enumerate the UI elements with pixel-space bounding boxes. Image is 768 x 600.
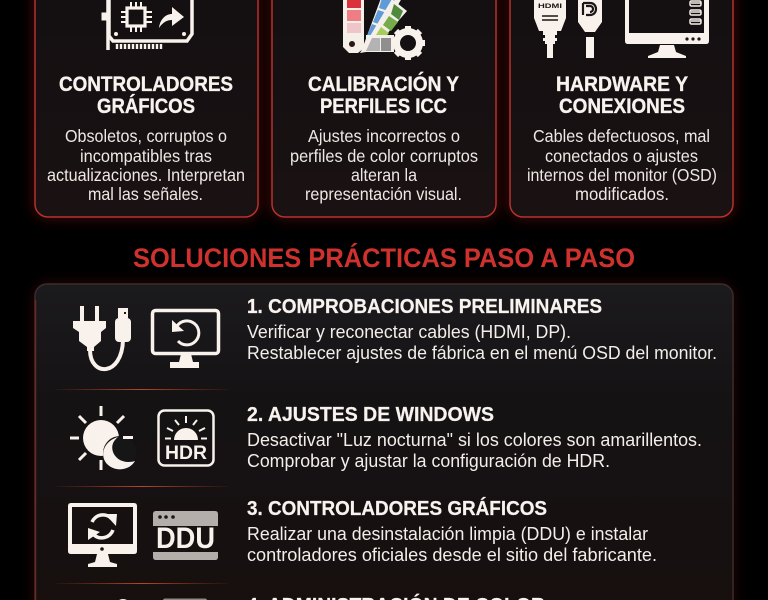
text: controladores gráficos: Obsoletos, corruptos o	[65, 126, 227, 146]
heading: hardware y conexiones: CONEXIONES	[559, 95, 685, 118]
heading: calibración y perfiles ICC: PERFILES ICC	[320, 95, 447, 118]
step 3 text: controladores oficiales desde el sitio del fabricante.	[247, 545, 657, 565]
icon: plug and USB cable	[73, 306, 131, 369]
heading: controladores gráficos	[59, 73, 233, 118]
icon: step 4 partial icons	[115, 598, 207, 600]
icon: sun and moon	[70, 406, 137, 470]
step 3 text: 3. CONTROLADORES GRÁFICOS	[247, 497, 547, 520]
text: hardware y conexiones: conectados o ajustes	[545, 146, 698, 166]
heading: calibración y perfiles ICC: CALIBRACIÓN Y	[308, 72, 459, 96]
icon: DDU	[153, 511, 218, 560]
text: hardware y conexiones: internos del monitor (OSD)	[527, 165, 717, 185]
icon: graphics card	[102, 0, 192, 50]
icon: monitor refresh	[68, 503, 137, 567]
text: controladores gráficos: mal las señales.	[88, 184, 203, 204]
step 3	[68, 497, 657, 567]
panel: controladores gráficos	[33, 0, 260, 219]
step 2 text: Desactivar "Luz nocturna" si los colores son amarillentos.	[247, 430, 702, 450]
heading: controladores gráficos: GRÁFICOS	[97, 95, 195, 118]
icon: monitor reset	[152, 310, 218, 368]
icon: DDU: DDU	[156, 522, 215, 555]
icon: HDMI and DisplayPort cables with monitor	[534, 0, 709, 58]
step 2	[70, 403, 702, 471]
heading: controladores gráficos: CONTROLADORES	[59, 73, 233, 96]
heading: hardware y conexiones: HARDWARE Y	[556, 73, 688, 96]
text: calibración y perfiles ICC: perfiles de color corruptos	[290, 146, 478, 166]
heading: hardware y conexiones	[556, 73, 688, 118]
text: calibración y perfiles ICC: alteran la	[351, 165, 417, 185]
step 2 text: Comprobar y ajustar la configuración de HDR.	[247, 451, 610, 471]
icon: HDR: HDR	[165, 443, 207, 464]
step 4	[115, 593, 545, 600]
step 2 text: 2. AJUSTES DE WINDOWS	[247, 403, 494, 426]
text: hardware y conexiones	[527, 126, 717, 204]
text: hardware y conexiones: Cables defectuosos, mal	[533, 126, 710, 146]
step 1	[73, 295, 717, 369]
heading: calibración y perfiles ICC	[308, 72, 459, 118]
panel: solutions	[33, 282, 735, 600]
step 1 text: 1. COMPROBACIONES PRELIMINARES	[247, 295, 602, 318]
icon: HDMI and DisplayPort cables with monitor: HDMI	[538, 4, 563, 10]
step 3 text	[247, 497, 657, 565]
icon: colour palette and gear	[343, 0, 425, 60]
text: calibración y perfiles ICC: representación visual.	[305, 184, 462, 204]
text: calibración y perfiles ICC	[290, 126, 478, 204]
text: controladores gráficos	[47, 126, 245, 204]
text: hardware y conexiones: modificados.	[575, 184, 669, 204]
icon: HDR	[158, 410, 214, 466]
text: controladores gráficos: actualizaciones. Interpretan	[47, 165, 245, 185]
panel: calibración y perfiles ICC	[270, 0, 498, 219]
step 1 text: Verificar y reconectar cables (HDMI, DP).	[247, 322, 571, 342]
section heading: SOLUCIONES PRÁCTICAS PASO A PASO	[133, 242, 635, 273]
text: controladores gráficos: incompatibles tras	[80, 146, 212, 166]
step 1 text: Restablecer ajustes de fábrica en el menú OSD del monitor.	[247, 343, 717, 363]
text: calibración y perfiles ICC: Ajustes incorrectos o	[308, 126, 460, 146]
step 2 text	[247, 403, 702, 471]
step 1 text	[247, 295, 717, 363]
step 3 text: Realizar una desinstalación limpia (DDU) e instalar	[247, 524, 648, 544]
panel: hardware y conexiones	[508, 0, 735, 219]
